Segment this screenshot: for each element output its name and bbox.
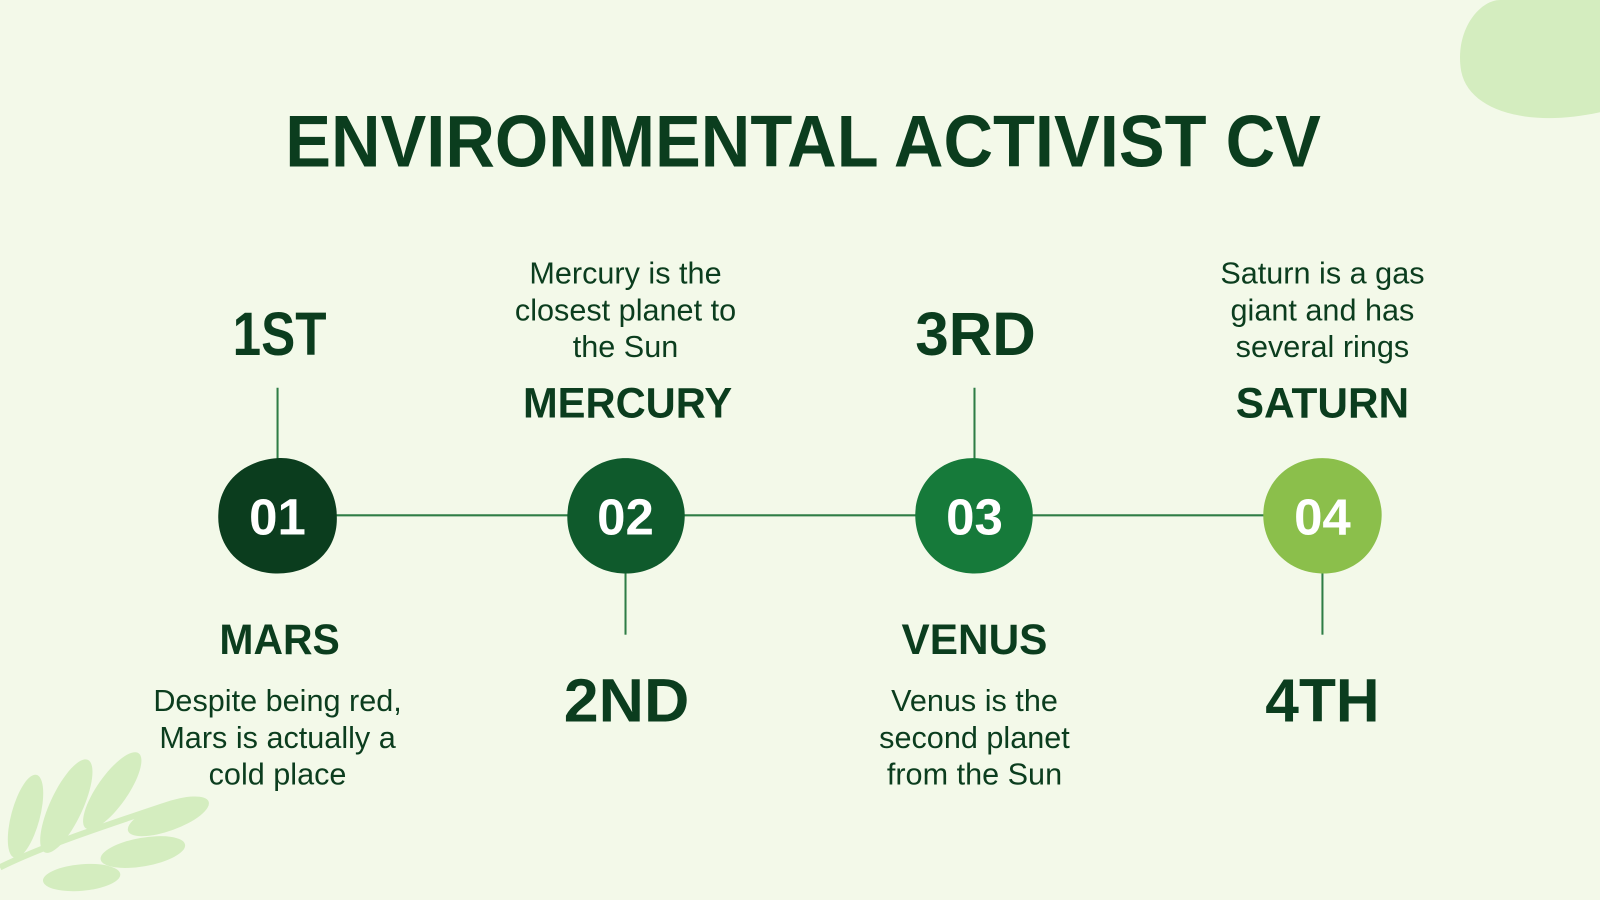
step 03: Venus is the bbox=[891, 684, 1058, 718]
step 01: MARS bbox=[219, 616, 340, 664]
step 03 bbox=[879, 300, 1070, 792]
step 04 bbox=[1220, 257, 1425, 734]
step 02: closest planet to bbox=[515, 293, 736, 327]
step 04: 4TH bbox=[1265, 666, 1380, 734]
step 04: SATURN bbox=[1236, 379, 1409, 427]
step 04: giant and has bbox=[1231, 293, 1414, 327]
step 03: 3RD bbox=[915, 300, 1036, 368]
step 01: 01 bbox=[249, 489, 306, 546]
step 03: 03 bbox=[946, 489, 1003, 546]
step 02: Mercury is the bbox=[529, 257, 722, 291]
step 02: 2ND bbox=[564, 666, 689, 734]
step 02 bbox=[515, 257, 736, 734]
step 03: second planet bbox=[879, 721, 1070, 755]
step 02: 02 bbox=[597, 489, 654, 546]
timeline line bbox=[278, 514, 1322, 516]
step 01: Despite being red, bbox=[153, 684, 402, 718]
step 04: Saturn is a gas bbox=[1220, 257, 1425, 291]
step 01: cold place bbox=[209, 758, 346, 792]
icon: leaf top right bbox=[1460, 0, 1600, 118]
title: ENVIRONMENTAL ACTIVIST CV bbox=[285, 99, 1321, 182]
step 02: MERCURY bbox=[523, 379, 732, 427]
step 03: from the Sun bbox=[887, 758, 1062, 792]
step 04: 04 bbox=[1294, 489, 1351, 546]
icon: branch bottom left bbox=[0, 744, 214, 894]
step 03: VENUS bbox=[902, 616, 1047, 664]
step 04: several rings bbox=[1236, 330, 1409, 364]
step 01 bbox=[153, 300, 402, 792]
step 01: Mars is actually a bbox=[159, 721, 397, 755]
step 01: 1ST bbox=[233, 300, 327, 368]
step 02: the Sun bbox=[573, 330, 678, 364]
